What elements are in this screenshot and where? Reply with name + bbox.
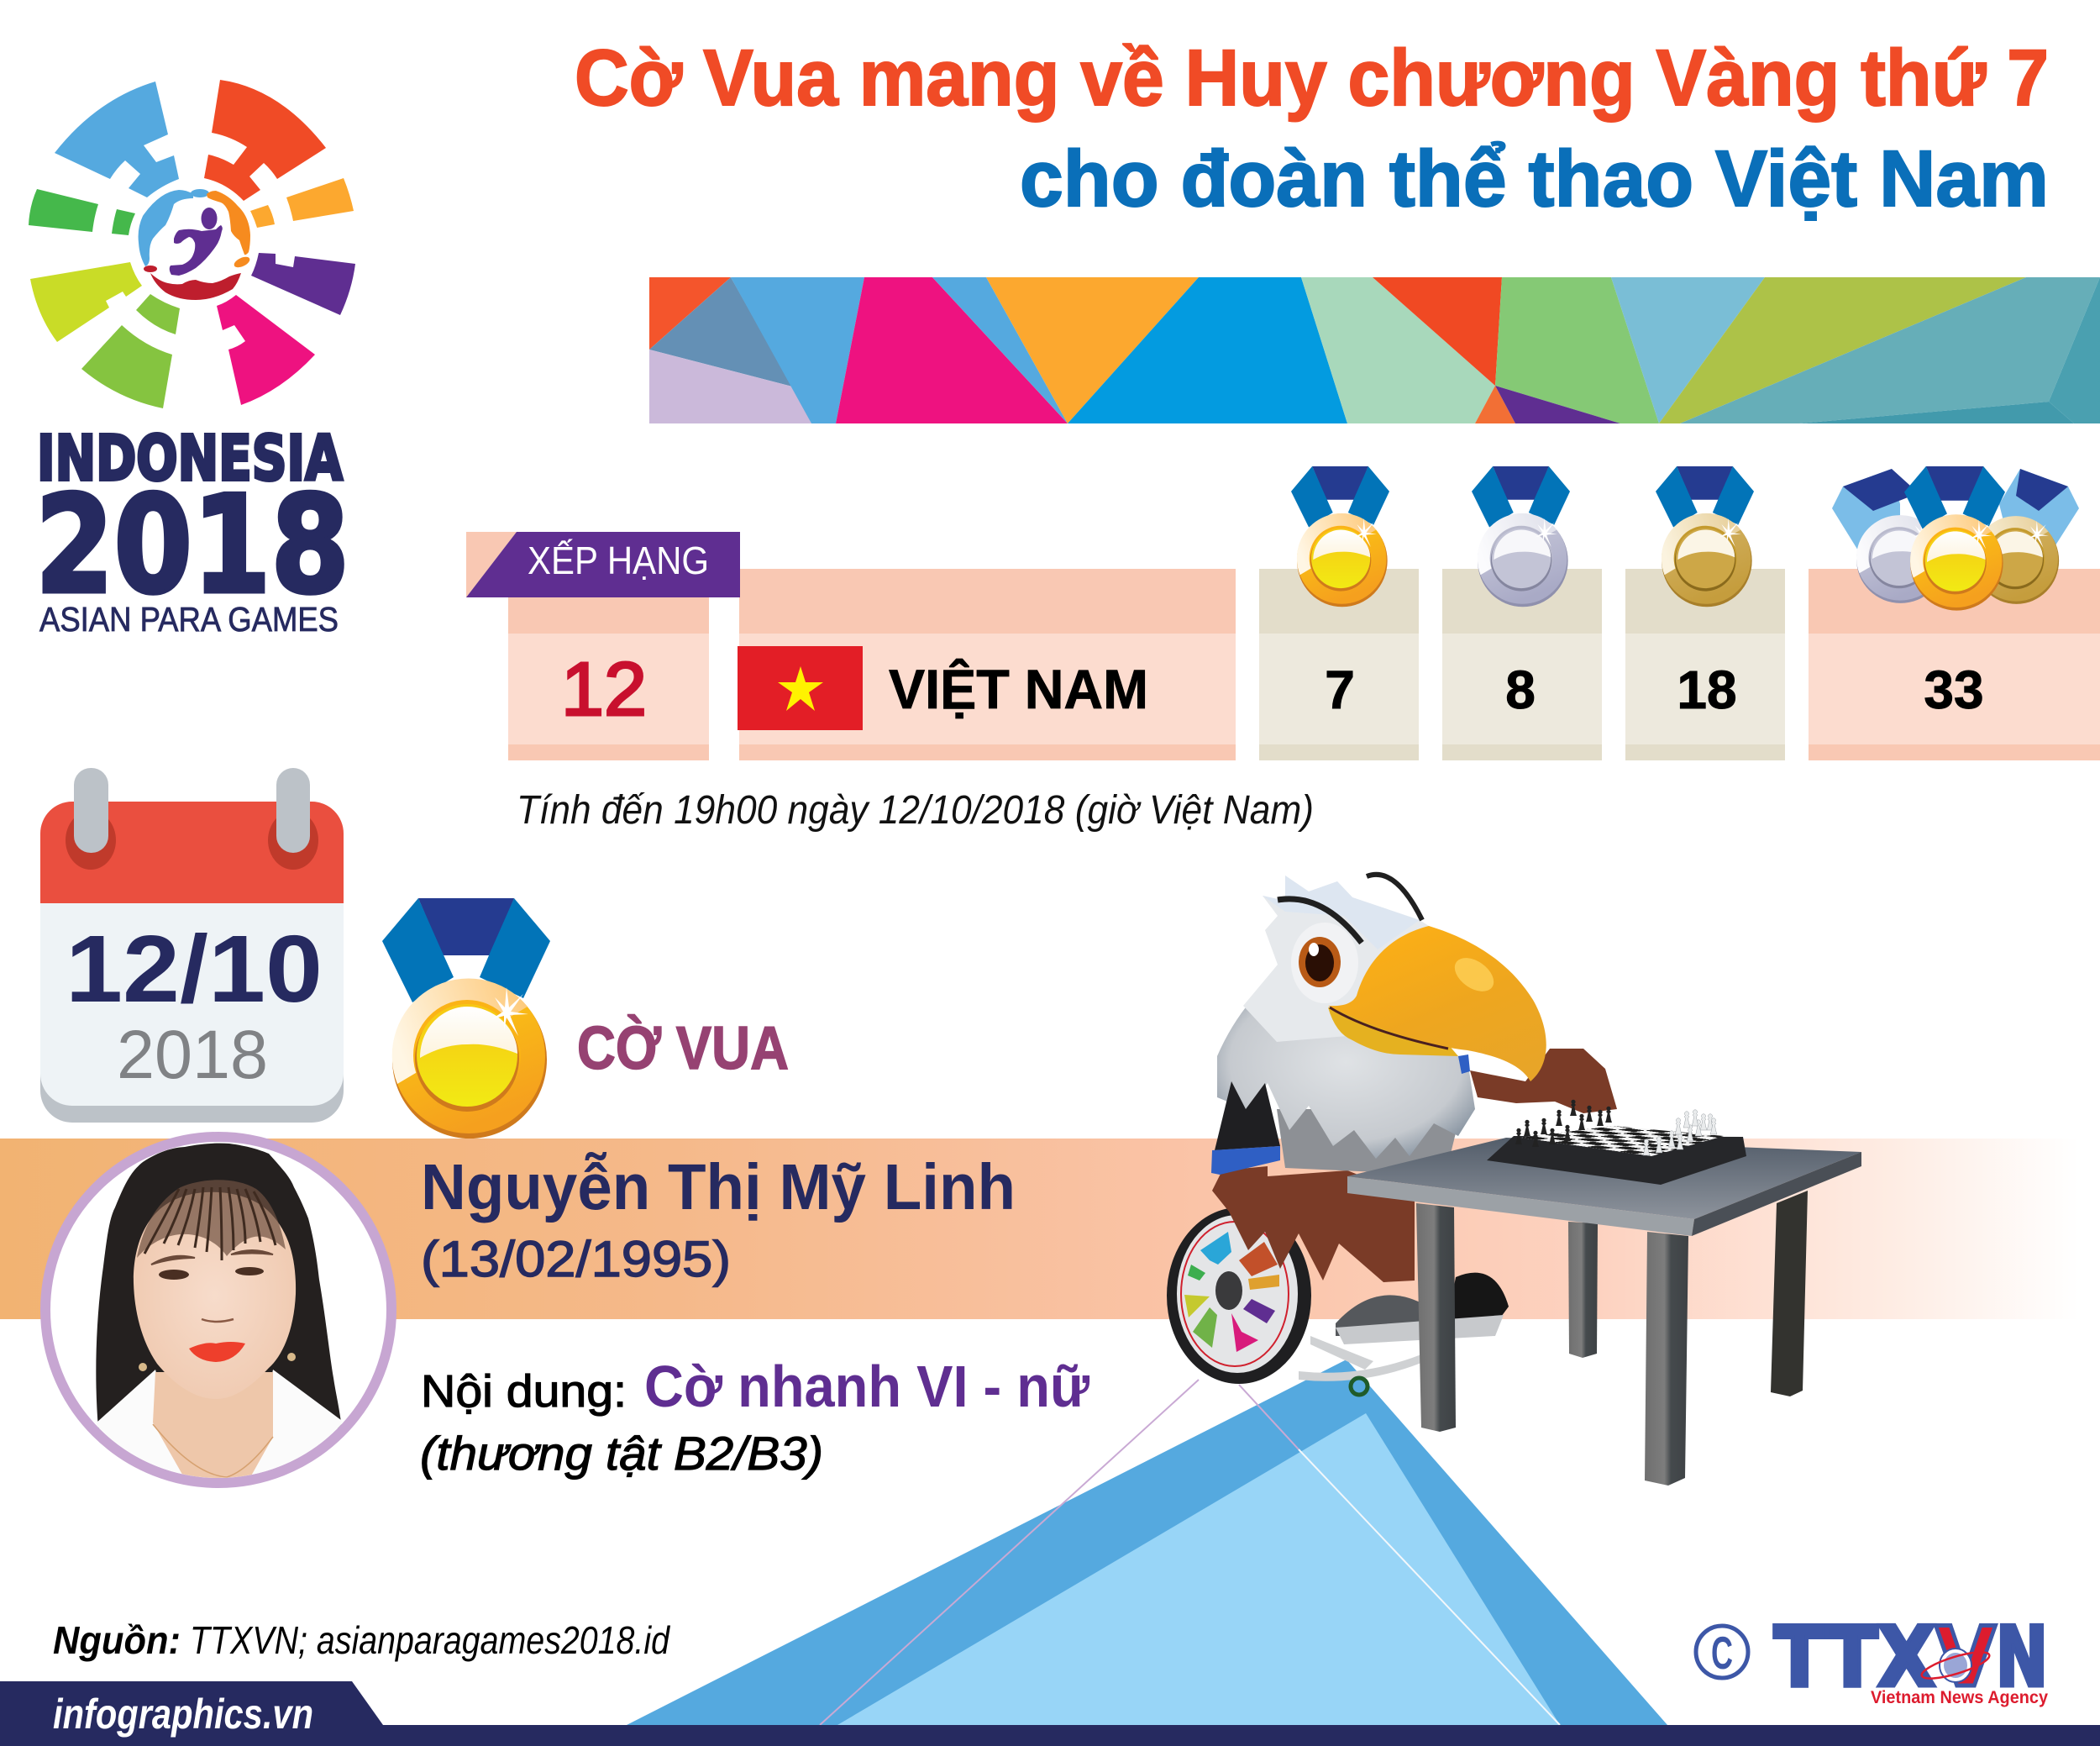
disability class: (thương tật B2/B3)	[420, 1427, 823, 1480]
logo: Indonesia 2018 Asian Para Games: 2018	[35, 466, 349, 623]
note: time of data: Tính đến 19h00 ngày 12/10/2018 (giờ Việt Nam)	[517, 788, 1314, 833]
icon: gold medal small	[1291, 466, 1389, 607]
title	[575, 34, 2049, 224]
calendar: 2018	[117, 1017, 268, 1093]
footer bar	[0, 1681, 2100, 1746]
mascot playing chess at a table	[1167, 875, 1861, 1486]
column: country	[738, 569, 1236, 760]
TTXVN logo: Vietnam News Agency	[1871, 1688, 2048, 1707]
column: total	[1809, 569, 2100, 760]
icon: three medals	[1832, 466, 2079, 611]
globe	[1919, 1647, 1992, 1684]
chess board	[1487, 1126, 1746, 1185]
ranking table	[466, 532, 2100, 760]
title: Cờ Vua mang về Huy chương Vàng thứ 7	[575, 34, 2049, 123]
source: TTXVN; asianparagames2018.id	[190, 1618, 670, 1662]
event label: Nội dung:	[421, 1366, 627, 1417]
rank badge: XẾP HẠNG	[528, 539, 709, 582]
title: cho đoàn thể thao Việt Nam	[1020, 134, 2049, 224]
mascot belly	[1277, 1109, 1462, 1172]
mascot head	[1243, 875, 1429, 1042]
table back legs	[1568, 1191, 1808, 1396]
colourful polygon banner	[649, 277, 2100, 423]
source	[53, 1618, 670, 1662]
flag of Vietnam	[738, 646, 863, 730]
icon: gold medal large	[382, 898, 550, 1139]
table front legs	[1416, 1203, 1688, 1486]
black chess pieces	[1515, 1100, 1612, 1147]
TTXVN logo: V	[1935, 1610, 1996, 1706]
mascot sleeve	[1211, 1054, 1470, 1175]
column: bronze count: 18	[1677, 660, 1737, 720]
column: country: VIỆT NAM	[889, 658, 1148, 720]
mascot wing and feathers	[1212, 1166, 1415, 1282]
athlete portrait	[45, 1137, 391, 1496]
rank badge	[466, 532, 740, 597]
logo emblem	[29, 80, 355, 408]
athlete birth date: (13/02/1995)	[421, 1231, 731, 1287]
mascot chest feathers	[1217, 983, 1475, 1159]
column: silver count	[1442, 569, 1602, 760]
white chess pieces	[1643, 1110, 1717, 1155]
mascot beak	[1328, 926, 1546, 1081]
column: silver count: 8	[1505, 660, 1536, 720]
source: Nguồn:	[53, 1618, 181, 1662]
calendar: 12/10	[66, 916, 323, 1022]
logo: Indonesia 2018 Asian Para Games	[29, 80, 355, 639]
heading: chess: CỜ VUA	[577, 1014, 789, 1082]
TTXVN logo	[1774, 1610, 2048, 1707]
icon: bronze medal small	[1656, 466, 1754, 607]
icon: silver medal small	[1472, 466, 1570, 607]
table top	[1347, 1138, 1861, 1236]
footer bar: infographics.vn	[53, 1691, 313, 1738]
orange name band	[0, 1139, 2100, 1319]
event name: Cờ nhanh VI - nữ	[644, 1354, 1089, 1419]
wheelchair	[1167, 1207, 1509, 1395]
TTXVN logo: TTX	[1774, 1610, 1935, 1706]
calendar	[40, 768, 344, 1123]
column: gold count	[1259, 569, 1419, 760]
copyright mark	[1696, 1626, 1748, 1679]
mascot arm and claw	[1470, 1049, 1617, 1113]
column: rank	[508, 569, 709, 760]
column: bronze count	[1625, 569, 1785, 760]
logo: Indonesia 2018 Asian Para Games: ASIAN PARA GAMES	[39, 600, 339, 639]
column: rank: 12	[561, 648, 647, 732]
logo: Indonesia 2018 Asian Para Games: INDONESIA	[37, 423, 343, 495]
column: total: 33	[1924, 660, 1984, 720]
blue triangles	[627, 1359, 1667, 1725]
column: gold count: 7	[1325, 660, 1355, 720]
TTXVN logo: N	[1996, 1610, 2048, 1706]
athlete name: Nguyễn Thị Mỹ Linh	[421, 1150, 1016, 1223]
copyright mark: C	[1711, 1627, 1733, 1679]
